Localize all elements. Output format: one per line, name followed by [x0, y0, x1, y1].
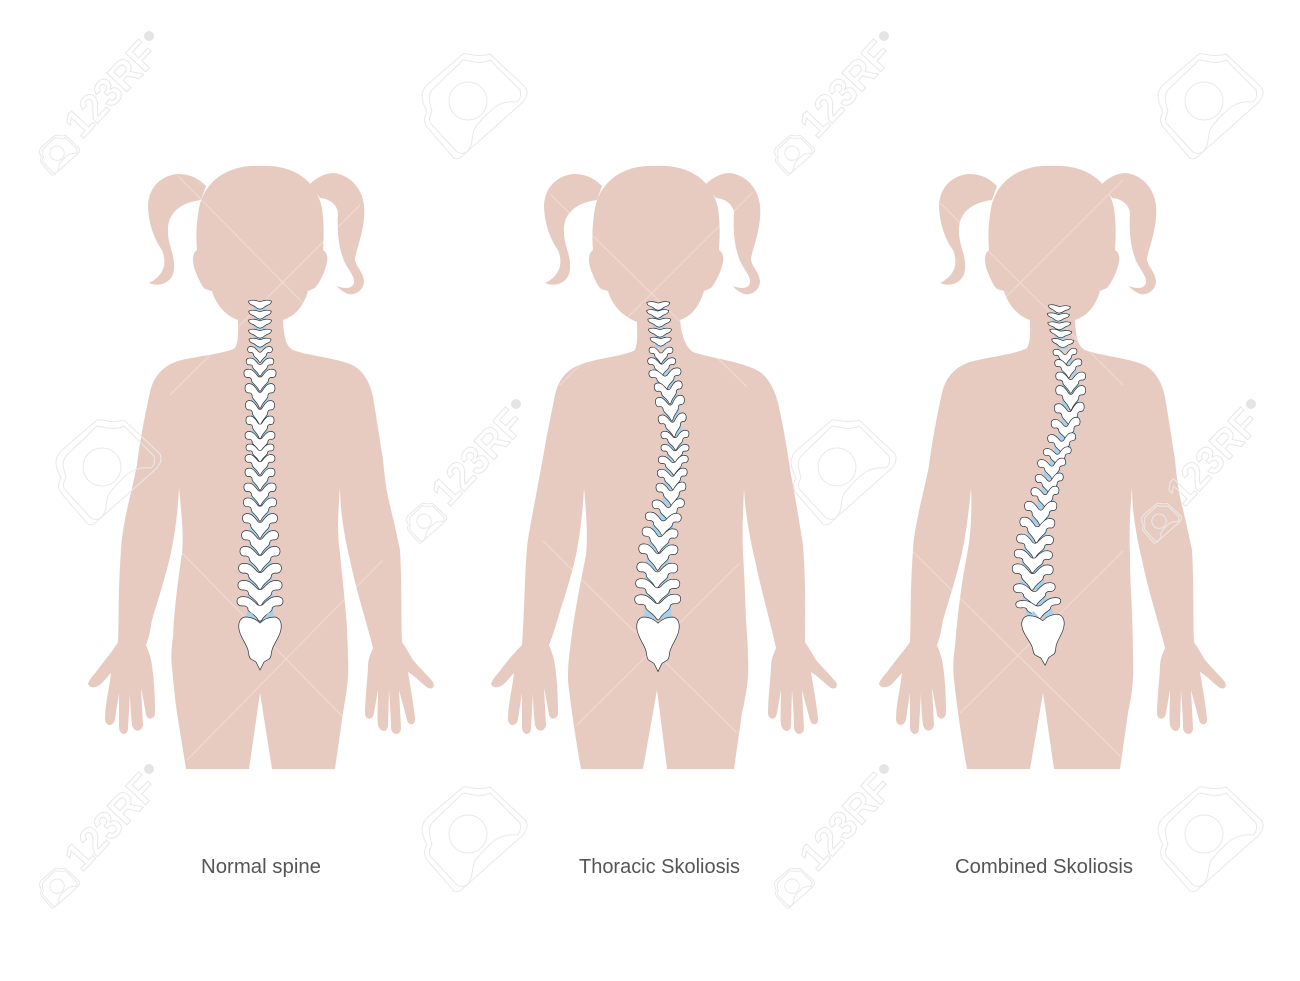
watermark stamp: top left: 123RF	[56, 33, 166, 146]
sacrum	[1021, 609, 1066, 666]
pigtail left	[544, 174, 602, 285]
watermark stamp: middle right	[1142, 399, 1268, 543]
figure: thoracic scoliosis child silhouette	[491, 166, 837, 769]
watermark stamp: bottom left: 123RF	[56, 766, 166, 879]
spine: thoracic scoliosis	[635, 302, 690, 672]
watermark stamp: middle left: 123RF	[423, 401, 533, 514]
pigtail right	[310, 173, 364, 294]
caption: thoracic skoliosis: Thoracic Skoliosis	[579, 856, 740, 878]
figure: normal spine child silhouette	[88, 166, 434, 769]
figure: combined scoliosis child silhouette	[879, 166, 1226, 769]
watermark lines over bodies	[170, 175, 1123, 760]
watermark stamp: middle left	[407, 399, 533, 543]
sacrum	[637, 612, 679, 672]
spine: normal	[237, 300, 283, 670]
body silhouette	[491, 166, 837, 769]
watermark stamp: bottom centre right	[775, 764, 901, 908]
pigtail right	[1102, 173, 1156, 294]
body silhouette	[879, 166, 1226, 769]
watermark eggs	[56, 54, 1263, 892]
caption: normal spine: Normal spine	[201, 856, 321, 878]
body silhouette	[88, 166, 434, 769]
watermark stamp: top centre right: 123RF	[791, 33, 901, 146]
watermark stamp: bottom left	[40, 764, 166, 908]
sacrum	[239, 612, 281, 670]
watermark stamp: middle right: 123RF	[1158, 401, 1268, 514]
pigtail left	[939, 174, 997, 285]
pigtail right	[706, 173, 760, 294]
watermark stamp: bottom centre right: 123RF	[791, 766, 901, 879]
spine: combined scoliosis	[1012, 304, 1086, 666]
caption: combined skoliosis: Combined Skoliosis	[955, 856, 1133, 878]
pigtail left	[148, 174, 206, 285]
watermark stamp: top left	[40, 31, 166, 175]
watermark stamp: top centre right	[775, 31, 901, 175]
